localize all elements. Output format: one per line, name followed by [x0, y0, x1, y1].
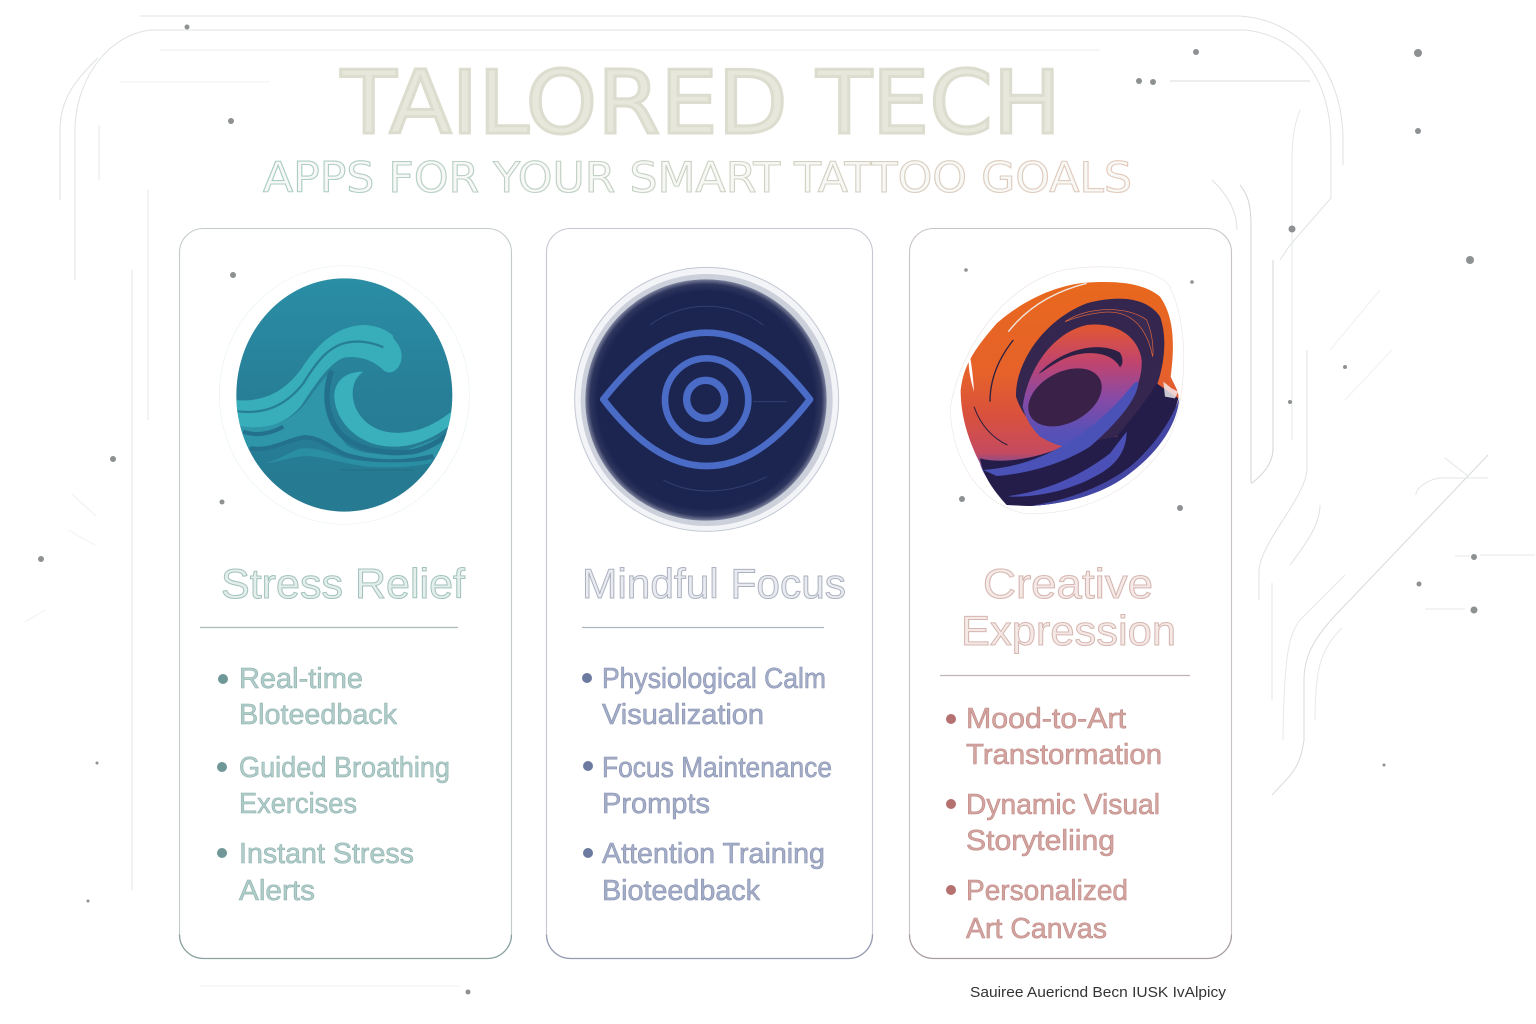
heading: mindful focus: Mindful Focus [582, 560, 846, 607]
panel: creative expression [910, 228, 1232, 958]
bullet list: creative expression: Art Canvas [966, 913, 1107, 945]
bullet list: creative expression: Personalized [966, 875, 1128, 907]
heading: stress relief: Stress Relief [221, 560, 465, 607]
bullet list: mindful focus: Physiological Calm [602, 663, 826, 695]
bullet list: creative expression: Mood-to-Art [966, 703, 1126, 735]
heading: creative expression [961, 560, 1176, 654]
heading: creative expression: Expression [961, 607, 1176, 654]
bullet list: mindful focus: Prompts [602, 788, 710, 820]
bullet list: stress relief: Bloteedback [239, 699, 397, 731]
bullet list: mindful focus [582, 663, 832, 907]
icon: colour swirl [950, 267, 1184, 514]
bullet list: creative expression [946, 703, 1162, 945]
bullet list: stress relief: Instant Stress [239, 838, 414, 870]
bullet list: creative expression: Dynamic Visual [966, 789, 1160, 821]
bullet list: stress relief: Alerts [239, 875, 315, 907]
source footnote: Sauiree Auericnd Becn IUSK IvAlpicy [970, 985, 1227, 1001]
bullet list: stress relief: Guided Broathing [239, 752, 450, 784]
icon: ocean wave [219, 266, 469, 524]
bullet list: stress relief: Real-time [239, 663, 363, 695]
bullet list: mindful focus: Attention Training [602, 838, 825, 870]
bullet list: creative expression: Transtormation [966, 739, 1162, 771]
bullet list: mindful focus: Bioteedback [602, 875, 760, 907]
panel: stress relief [180, 228, 512, 958]
title: TAILORED TECH [340, 52, 1061, 154]
bullet list: stress relief [217, 663, 450, 907]
icon: eye [575, 267, 839, 531]
panel: mindful focus [546, 228, 872, 958]
bullet list: creative expression: Storyteliing [966, 825, 1115, 857]
bullet list: mindful focus: Visualization [602, 699, 764, 731]
bullet list: stress relief: Exercises [239, 788, 357, 820]
subtitle: APPS FOR YOUR SMART TATTOO GOALS [263, 153, 1132, 202]
bullet list: mindful focus: Focus Maintenance [602, 752, 832, 784]
heading: creative expression: Creative [983, 560, 1153, 607]
